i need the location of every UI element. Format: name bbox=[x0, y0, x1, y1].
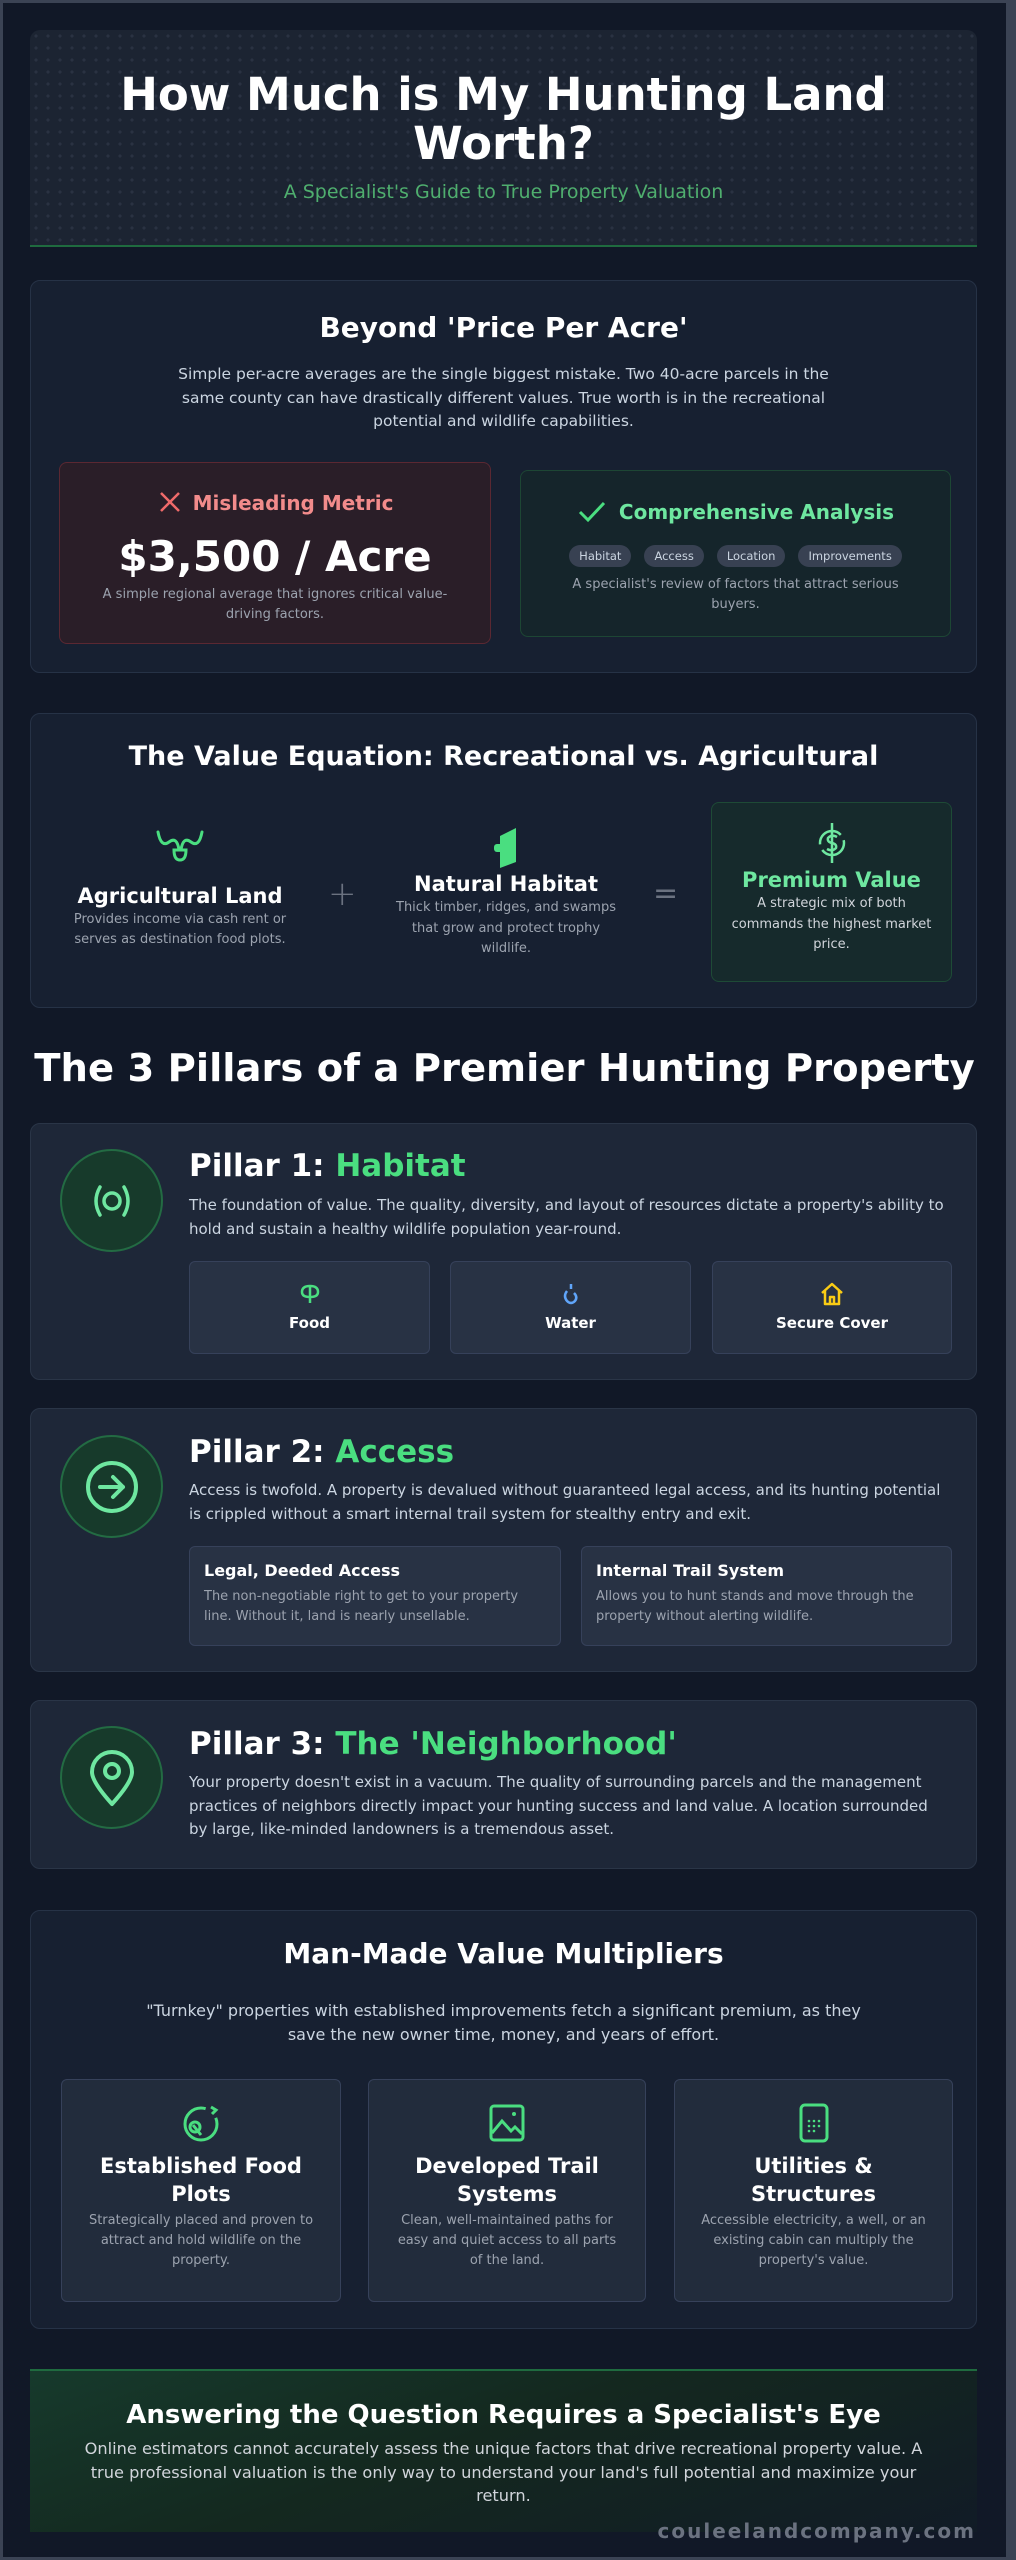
card: trail systems: Developed Trail Systems bbox=[415, 2154, 599, 2206]
desc: Your property doesn't exist in a vacuum. The quality of surrounding parcels and the management practices of neighbors directly impact your hunting success and land value. A location surrounded by large, like-minded landowners is a tremendous asset. bbox=[189, 1773, 928, 1838]
title: Pillar 2: Access bbox=[189, 1434, 454, 1470]
sub: water bbox=[450, 1261, 691, 1354]
intro text: Simple per-acre averages are the single biggest mistake. Two 40-acre parcels in the same county can have drastically different values. True worth is in the recreational potential and wildlife capabilities. bbox=[178, 365, 829, 430]
sub: legal access: Legal, Deeded Access bbox=[204, 1561, 400, 1580]
card: misleading metric bbox=[59, 462, 491, 644]
item: agricultural land bbox=[74, 830, 286, 947]
section heading: 3 pillars: The 3 Pillars of a Premier Hunting Property bbox=[34, 1046, 975, 1091]
sub: secure cover: Secure Cover bbox=[776, 1314, 888, 1332]
icon: dollar bbox=[818, 823, 846, 863]
card: premium value bbox=[711, 802, 952, 982]
icon: habitat marker bbox=[494, 828, 516, 868]
card: food plots: Established Food Plots bbox=[100, 2154, 302, 2206]
sub: legal access bbox=[189, 1546, 561, 1646]
desc: A specialist's review of factors that attract serious buyers. bbox=[572, 577, 899, 612]
intro text: "Turnkey" properties with established improvements fetch a significant premium, as they save the new owner time, money, and years of effort. bbox=[146, 2001, 861, 2044]
sub: internal trail system: Allows you to hunt stands and move through the property without alerting wildlife. bbox=[596, 1589, 914, 1624]
subtitle: A Specialist's Guide to True Property Valuation bbox=[284, 181, 723, 203]
tags: Location bbox=[727, 549, 775, 563]
sub: legal access: The non-negotiable right to get to your property line. Without it, land is nearly unsellable. bbox=[204, 1589, 518, 1624]
card: trail systems: Clean, well-maintained paths for easy and quiet access to all parts of the land. bbox=[398, 2213, 616, 2268]
panel: man-made value multipliers bbox=[30, 1910, 977, 2329]
icon: arrow circle bbox=[60, 1435, 163, 1538]
text: Online estimators cannot accurately assess the unique factors that drive recreational property value. A true professional valuation is the only way to understand your land's full potential and maximize your return. bbox=[85, 2439, 922, 2505]
card: utilities bbox=[674, 2079, 953, 2302]
desc: A simple regional average that ignores critical value-driving factors. bbox=[103, 587, 447, 622]
panel: value equation bbox=[30, 713, 977, 1008]
title: Worth? bbox=[413, 117, 594, 170]
callout: specialist's eye bbox=[30, 2369, 977, 2532]
item: natural habitat bbox=[396, 828, 616, 956]
panel: pillar 2 access bbox=[30, 1408, 977, 1672]
item: agricultural land: Agricultural Land bbox=[78, 884, 282, 908]
icon: map pin bbox=[60, 1726, 163, 1829]
card: comprehensive analysis bbox=[520, 470, 951, 637]
card: food plots bbox=[61, 2079, 341, 2302]
sub: food bbox=[189, 1261, 430, 1354]
header bbox=[30, 30, 977, 247]
card: trail systems bbox=[368, 2079, 646, 2302]
title: How Much is My Hunting Land bbox=[120, 68, 887, 121]
panel: beyond price per acre bbox=[30, 280, 977, 673]
footer: website: couleelandcompany.com bbox=[658, 2519, 976, 2543]
tags: Access bbox=[654, 549, 694, 563]
icon: horns bbox=[156, 830, 204, 862]
heading: Beyond 'Price Per Acre' bbox=[319, 311, 688, 344]
panel: pillar 1 habitat bbox=[30, 1123, 977, 1380]
item: natural habitat: Thick timber, ridges, and swamps that grow and protect trophy wildlife. bbox=[396, 900, 616, 956]
heading: Answering the Question Requires a Specialist's Eye bbox=[126, 2400, 881, 2430]
desc: Access is twofold. A property is devalued without guaranteed legal access, and its hunting potential is crippled without a smart internal trail system for stealthy entry and exit. bbox=[189, 1481, 940, 1522]
label comprehensive: Comprehensive Analysis bbox=[619, 500, 894, 524]
card: utilities: Utilities & Structures bbox=[751, 2154, 876, 2206]
sub: internal trail system: Internal Trail System bbox=[596, 1561, 784, 1580]
label misleading: Misleading Metric bbox=[193, 491, 393, 515]
tags: Improvements bbox=[808, 549, 892, 563]
tags: Habitat bbox=[579, 549, 621, 563]
heading: The Value Equation: Recreational vs. Agricultural bbox=[129, 741, 878, 772]
item: agricultural land: Provides income via cash rent or serves as destination food plots. bbox=[74, 912, 286, 947]
sub: food: Food bbox=[289, 1314, 330, 1332]
title: Pillar 3: The 'Neighborhood' bbox=[189, 1726, 677, 1762]
title: Pillar 1: Habitat bbox=[189, 1148, 466, 1184]
card: food plots: Strategically placed and proven to attract and hold wildlife on the property. bbox=[89, 2213, 313, 2268]
plus: + bbox=[328, 874, 356, 914]
heading: Man-Made Value Multipliers bbox=[283, 1937, 724, 1970]
item: natural habitat: Natural Habitat bbox=[414, 872, 598, 896]
card: premium value: A strategic mix of both commands the highest market price. bbox=[732, 896, 931, 952]
desc: The foundation of value. The quality, diversity, and layout of resources dictate a property's ability to hold and sustain a healthy wildlife population year-round. bbox=[189, 1196, 944, 1238]
sub: internal trail system bbox=[581, 1546, 952, 1646]
title bbox=[120, 68, 887, 170]
sub: water: Water bbox=[545, 1314, 596, 1332]
card: premium value: Premium Value bbox=[742, 868, 921, 892]
big number: $3,500 / Acre bbox=[118, 532, 432, 581]
icon: signal circle bbox=[60, 1149, 163, 1252]
panel: pillar 3 neighborhood bbox=[30, 1700, 977, 1869]
card: utilities: Accessible electricity, a well, or an existing cabin can multiply the property's value. bbox=[701, 2213, 926, 2268]
tags bbox=[569, 545, 902, 567]
sub: secure cover bbox=[712, 1261, 952, 1354]
equals: = bbox=[653, 876, 678, 911]
